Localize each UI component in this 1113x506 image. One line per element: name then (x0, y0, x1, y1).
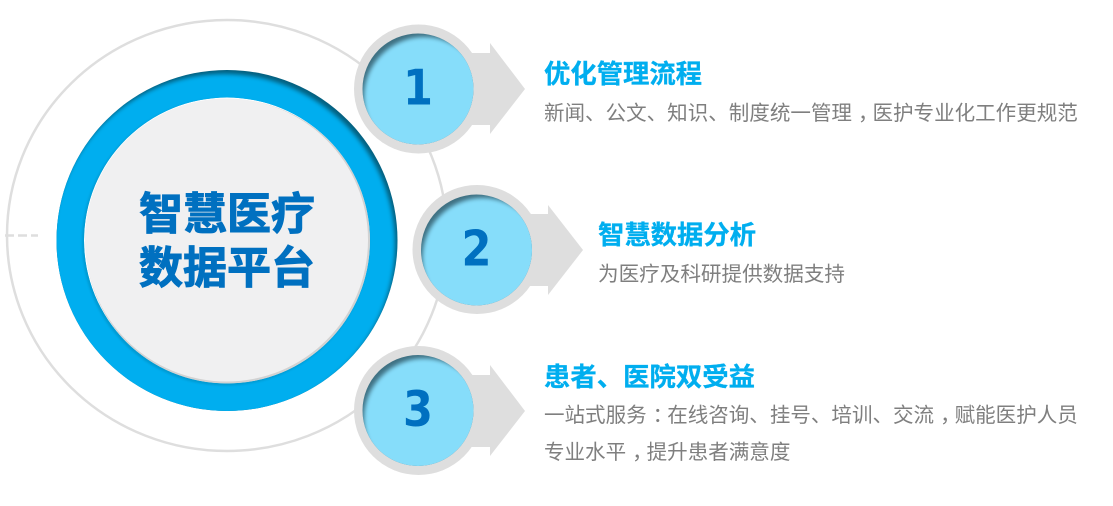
description 3: 一站式服务 ：在线咨询、挂号、培训、交流 ，赋能医护人员 (544, 404, 1078, 427)
badge 2: 2 (462, 220, 491, 277)
badge 3: 3 (403, 380, 433, 438)
hub title: 数据平台 (139, 244, 315, 293)
description 3 (544, 404, 1078, 464)
arrow 2 (518, 205, 583, 295)
hub blue ring (53, 70, 398, 416)
item 3 (354, 346, 1078, 478)
description 2: 为医疗及科研提供数据支持 (598, 263, 845, 286)
badge 2 (412, 185, 532, 314)
badge 3 (354, 346, 474, 475)
outer orbit ring (7, 20, 447, 451)
hub title: 智慧医疗 (139, 190, 315, 239)
central hub (53, 70, 398, 416)
hub inner disc (82, 98, 372, 386)
description 3: 专业水平 ，提升患者满意度 (544, 441, 790, 464)
description 1: 新闻、公文、知识、制度统一管理 ，医护专业化工作更规范 (544, 102, 1078, 125)
item 1 (354, 24, 1078, 157)
badge 1: 1 (403, 59, 433, 116)
heading 1: 优化管理流程 (544, 59, 702, 89)
dashed axis marker (5, 234, 38, 237)
heading 2: 智慧数据分析 (598, 220, 756, 250)
item 2 (412, 185, 845, 318)
arrow 3 (460, 365, 525, 456)
heading 3: 患者、医院双受益 (544, 362, 755, 392)
arrow 1 (460, 43, 525, 134)
hub title (139, 190, 315, 293)
badge 1 (354, 24, 474, 154)
